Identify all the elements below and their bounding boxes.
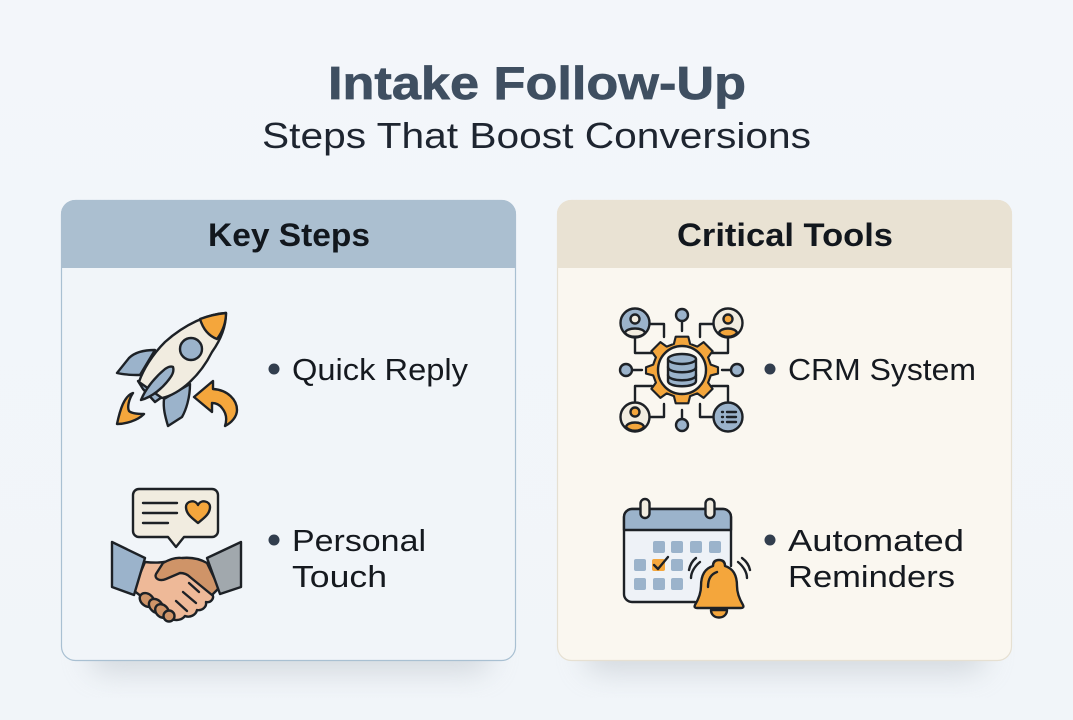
icon: calendar with bell — [624, 499, 750, 618]
label: automated reminders — [788, 523, 964, 594]
title: Intake Follow-Up — [328, 57, 746, 109]
label: crm system: CRM System — [788, 352, 976, 387]
panel header: critical tools — [557, 200, 1012, 268]
bullet: automated reminders — [764, 534, 776, 546]
subtitle: Steps That Boost Conversions — [262, 115, 811, 156]
label: automated reminders: Automated — [788, 523, 964, 558]
label: personal touch: Touch — [292, 559, 387, 594]
label: personal touch — [292, 523, 426, 594]
panel: key steps — [61, 200, 516, 672]
label: personal touch: Personal — [292, 523, 426, 558]
panel header: critical tools: Critical Tools — [677, 217, 893, 253]
icon: handshake with message bubble — [112, 489, 241, 622]
bullet: crm system — [764, 364, 776, 374]
panel header: key steps: Key Steps — [208, 217, 370, 253]
bullet: quick reply — [268, 364, 280, 374]
bullet: personal touch — [268, 534, 280, 546]
label: quick reply: Quick Reply — [292, 352, 469, 387]
label: automated reminders: Reminders — [788, 559, 955, 594]
panel: critical tools — [557, 200, 1012, 672]
icon: rocket with reply arrow — [117, 313, 237, 426]
panel header: key steps — [61, 200, 516, 268]
icon: crm gear network — [620, 308, 743, 432]
